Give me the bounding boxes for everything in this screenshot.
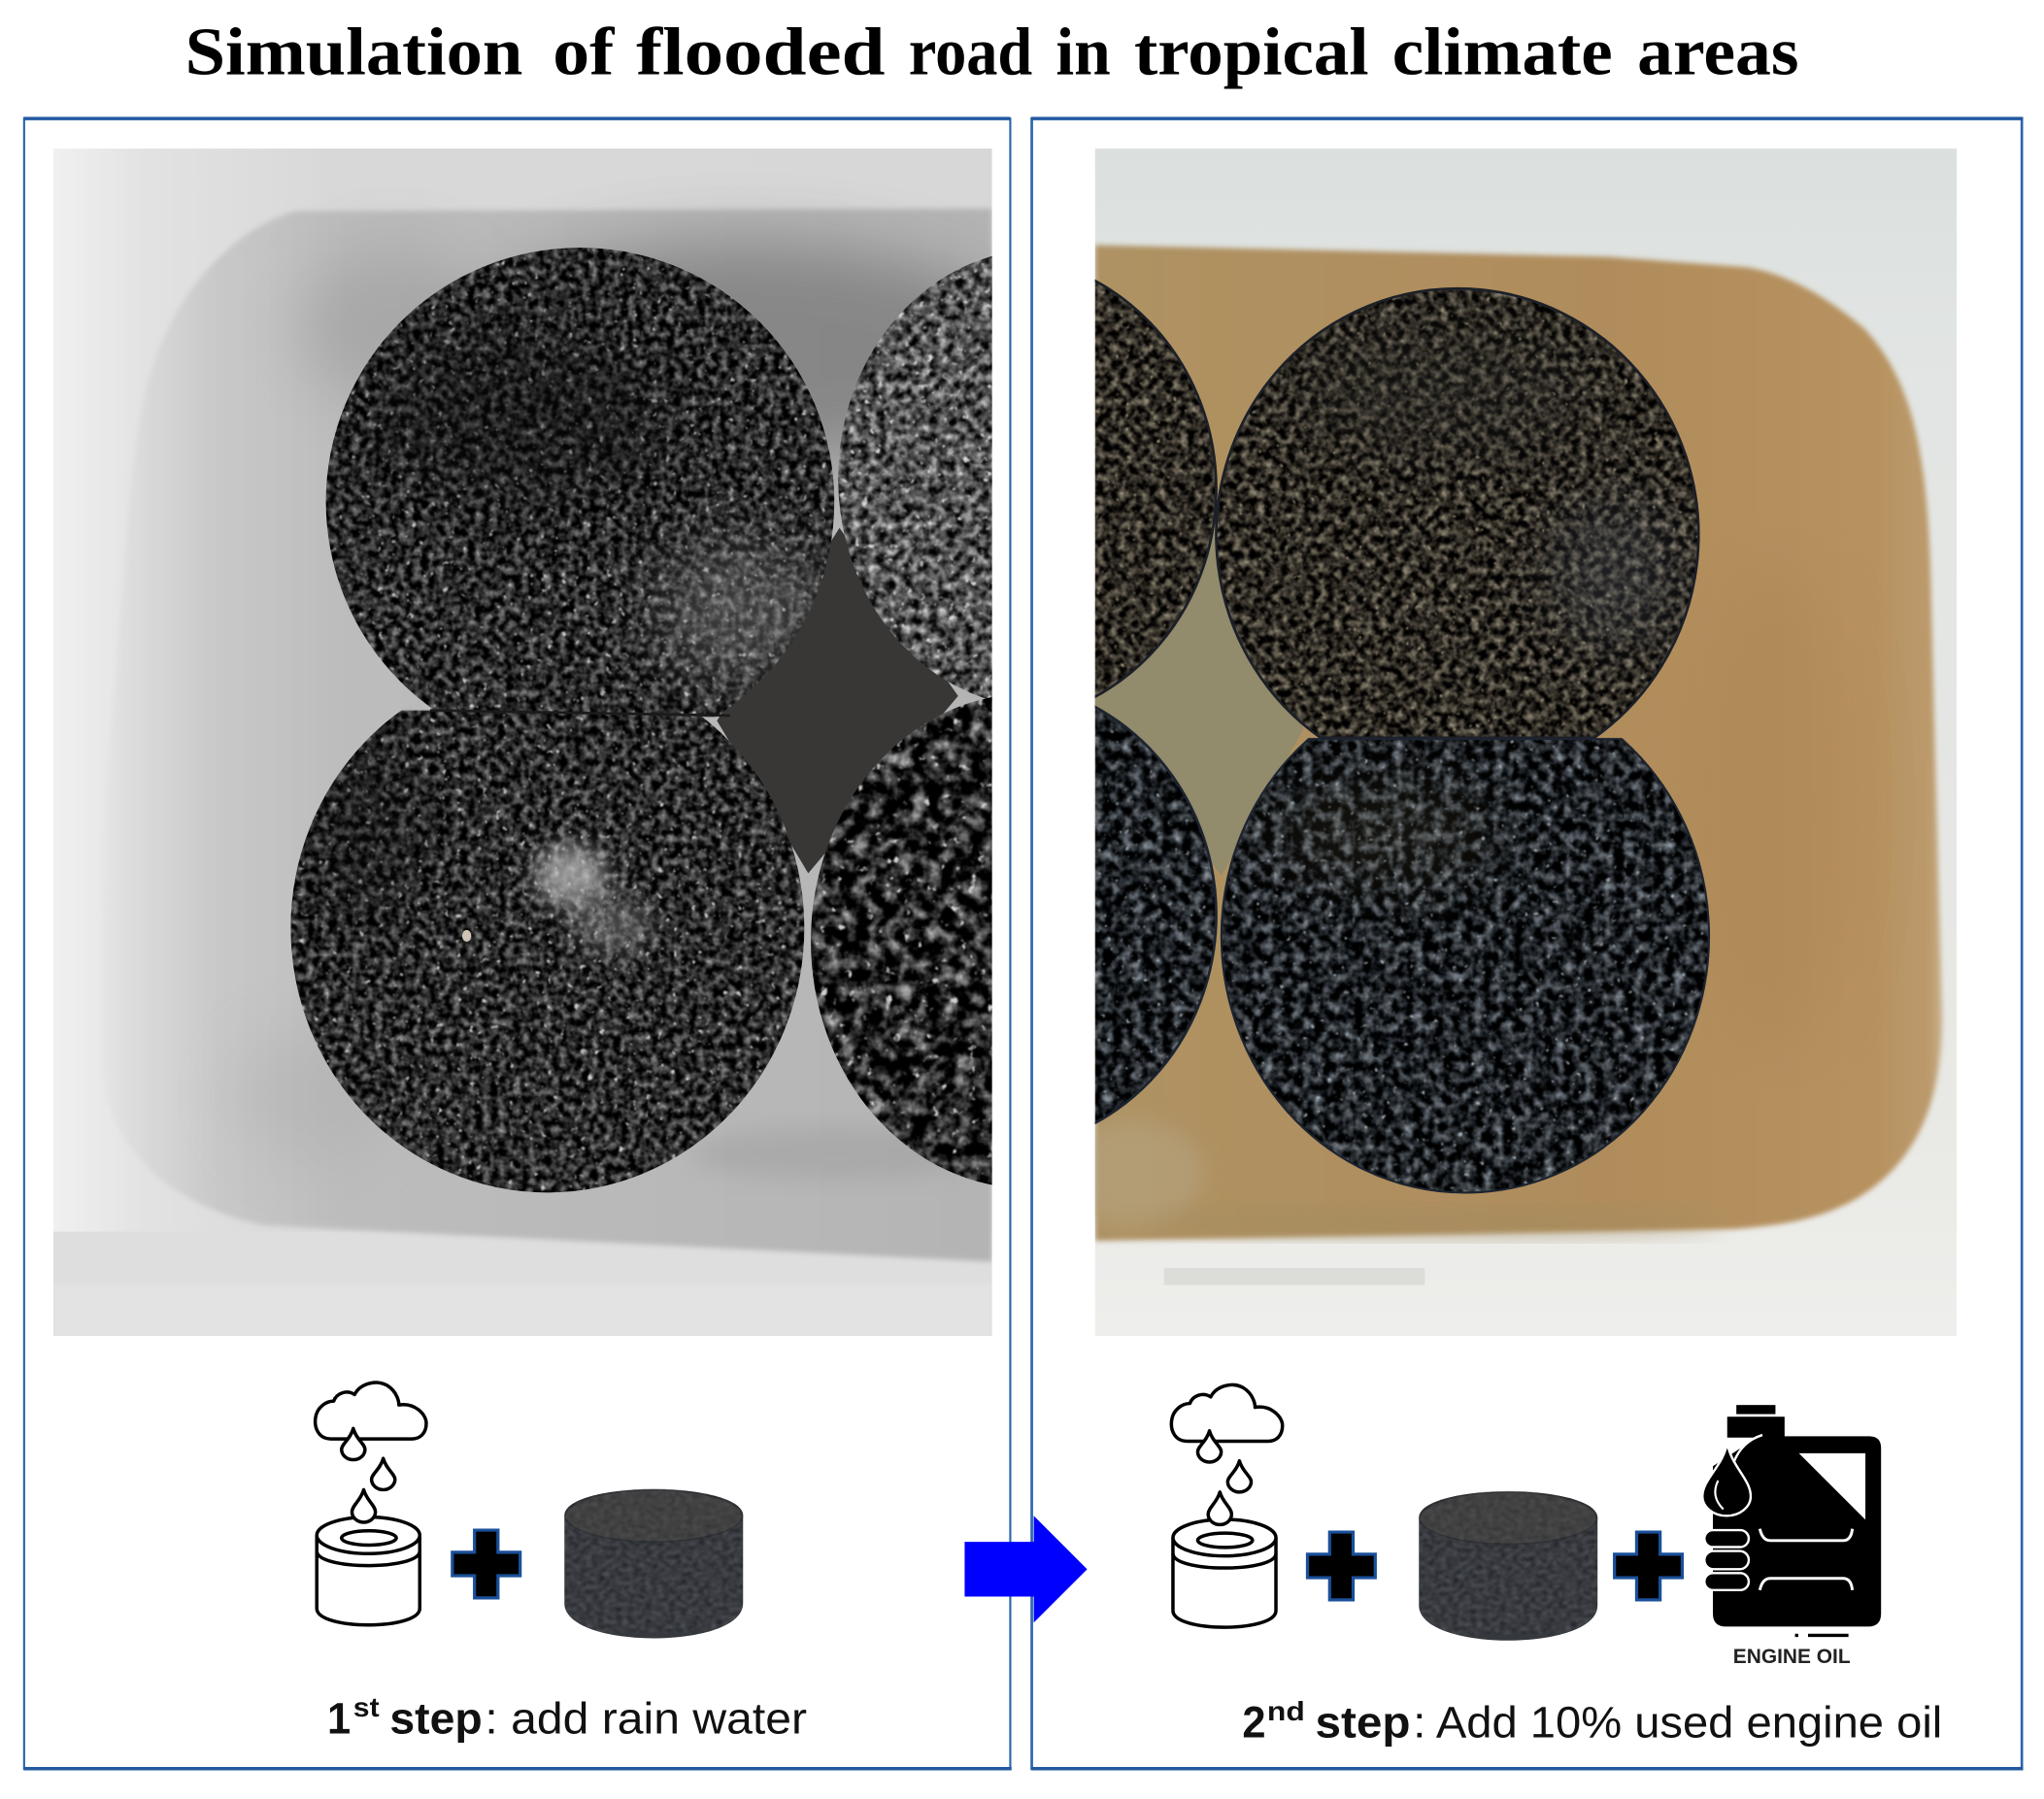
asphalt disc: lower left [289, 711, 808, 1195]
title: climate [1392, 16, 1613, 90]
caption: second step: 2 [1242, 1698, 1266, 1748]
caption: first step: : add rain water [485, 1693, 807, 1743]
arrow: from first step to second step [964, 1516, 1088, 1622]
caption: second step: : Add 10% used engine oil [1413, 1698, 1942, 1748]
panel: first step [23, 118, 1030, 1769]
photo: asphalt samples in rain water [53, 149, 1030, 1336]
icon: asphalt cylinder [564, 1489, 743, 1638]
caption: first step: step [389, 1693, 483, 1743]
caption: second step [1242, 1695, 1942, 1748]
photo: asphalt samples in oily water [1095, 149, 1957, 1336]
caption: first step: st [353, 1691, 380, 1722]
icon: rain cloud, drops and water cup [1171, 1384, 1283, 1627]
title: road [909, 16, 1032, 90]
icon: rain cloud, drops and water cup [316, 1383, 426, 1625]
title: tropical [1134, 16, 1369, 90]
caption: first step [327, 1691, 807, 1743]
label: engine oil: ENGINE OIL [1733, 1646, 1851, 1668]
title: in [1056, 16, 1111, 90]
caption: second step: step [1316, 1698, 1411, 1748]
asphalt disc: lower left [1095, 707, 1216, 1122]
title: of [553, 16, 615, 90]
icon: plus sign [1307, 1532, 1375, 1600]
title: Simulation [185, 16, 522, 90]
asphalt disc: lower right [806, 691, 997, 1192]
asphalt disc: upper right [1215, 286, 1702, 741]
asphalt disc: lower right [1221, 738, 1710, 1196]
icon: plus sign [452, 1530, 520, 1598]
asphalt disc: upper left [323, 245, 840, 716]
title: areas [1637, 16, 1799, 90]
caption: first step: 1 [327, 1693, 351, 1743]
icon: engine oil bottle [1702, 1405, 1881, 1637]
caption: second step: nd [1267, 1695, 1305, 1726]
icon: plus sign [1615, 1532, 1682, 1600]
title [185, 16, 1799, 90]
panel: second step [964, 117, 2024, 1771]
asphalt disc: upper left [1095, 281, 1216, 697]
title: flooded [636, 16, 886, 90]
icon: asphalt cylinder [1419, 1491, 1597, 1641]
asphalt disc: upper right [834, 248, 997, 711]
